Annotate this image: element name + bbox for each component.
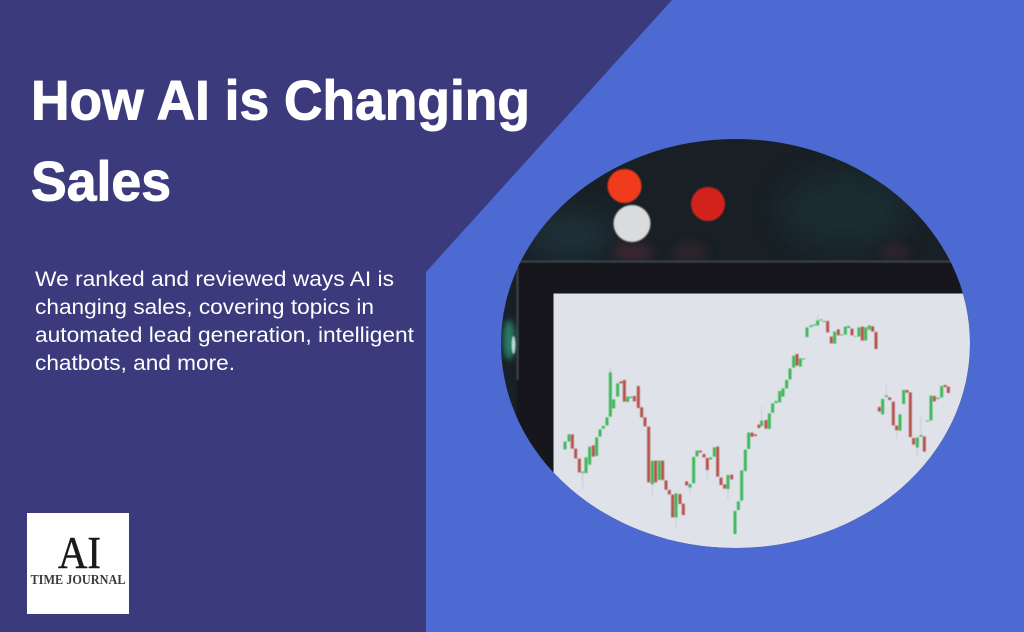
photo background [495,135,975,555]
red candles [766,321,948,452]
panel: dark navy angled panel [0,0,672,632]
teal screen reflection [503,320,516,360]
description text: We ranked and reviewed ways AI is [35,267,394,291]
title: Sales [31,150,171,212]
title: How AI is Changing [31,68,530,132]
logo: AI Time Journal: TIME JOURNAL [30,572,126,587]
left segment of candles [565,367,759,534]
description text: chatbots, and more. [35,351,235,375]
candlestick chart [565,315,948,534]
description text: changing sales, covering topics in [35,295,374,319]
description text: automated lead generation, intelligent [35,323,414,347]
title [31,68,530,212]
description text [35,267,414,375]
logo: AI Time Journal [27,513,129,614]
green candles [762,319,942,448]
green candles [565,372,749,534]
bokeh lights [608,169,725,242]
faint wicks [762,315,921,457]
faint wicks [583,367,728,528]
monitor screen [554,294,984,564]
logo: AI Time Journal: AI [58,527,101,578]
red candles [572,380,759,517]
right segment of candles [762,315,948,457]
monitor bezel [517,262,987,562]
photo: trading chart on monitor in oval frame [495,135,987,564]
